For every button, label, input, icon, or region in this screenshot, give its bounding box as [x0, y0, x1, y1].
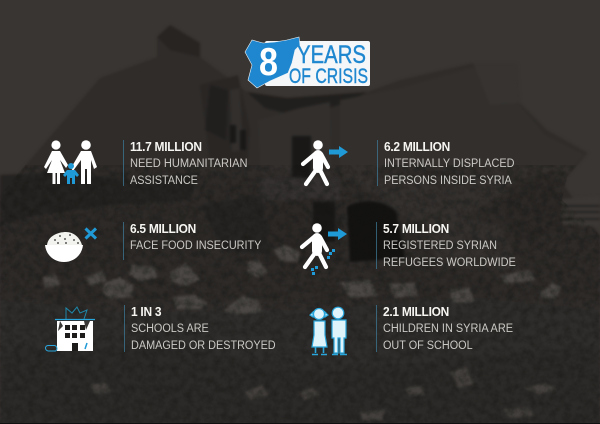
stat: schools: 1 IN 3 [131, 305, 161, 319]
stat: humanitarian assistance: 11.7 MILLION [130, 140, 202, 154]
icon: food bowl with cross [45, 228, 96, 262]
stat: children out of school: 2.1 MILLION [383, 305, 449, 319]
stat: schools [124, 305, 294, 352]
stat: humanitarian assistance [123, 140, 259, 186]
stat: children out of school: CHILDREN IN SYRIA ARE [383, 321, 513, 335]
logo text: years: YEARS [297, 41, 366, 69]
stat: refugees: 5.7 MILLION [383, 222, 449, 236]
stat: refugees [376, 222, 531, 269]
stat: food insecurity: FACE FOOD INSECURITY [130, 238, 261, 252]
stat: schools: SCHOOLS ARE [131, 321, 209, 335]
logo: 8 years of crisis [245, 37, 370, 88]
icon: walking person with arrow [303, 140, 348, 184]
collapsed rubble band [0, 170, 600, 300]
stat: refugees: REGISTERED SYRIAN [383, 238, 497, 252]
icon: two children [310, 307, 347, 354]
stat: humanitarian assistance: NEED HUMANITARIAN [130, 156, 247, 170]
stat: internally displaced: PERSONS INSIDE SYRIA [384, 172, 512, 186]
stones [43, 245, 561, 314]
distant stand [562, 196, 600, 227]
stat: children out of school: OUT OF SCHOOL [383, 338, 473, 352]
stat: food insecurity: 6.5 MILLION [130, 222, 196, 236]
icon: map of Syria [245, 37, 300, 88]
stat: refugees: REFUGEES WORLDWIDE [383, 254, 516, 268]
stat: internally displaced: 6.2 MILLION [384, 140, 450, 154]
numeral 8: 8 [259, 41, 278, 84]
icon: damaged school [45, 307, 95, 351]
icon: walking refugee with arrow and footprints [302, 223, 347, 275]
ground [0, 298, 600, 424]
stat: humanitarian assistance: ASSISTANCE [130, 172, 198, 186]
logo text: of crisis: OF CRISIS [289, 65, 368, 88]
icon: family [44, 140, 97, 184]
stat: schools: DAMAGED OR DESTROYED [131, 338, 276, 352]
stat: internally displaced: INTERNALLY DISPLACED [384, 156, 514, 170]
stat: children out of school [376, 305, 528, 352]
stat: food insecurity [123, 222, 278, 260]
stat: internally displaced [377, 140, 531, 186]
